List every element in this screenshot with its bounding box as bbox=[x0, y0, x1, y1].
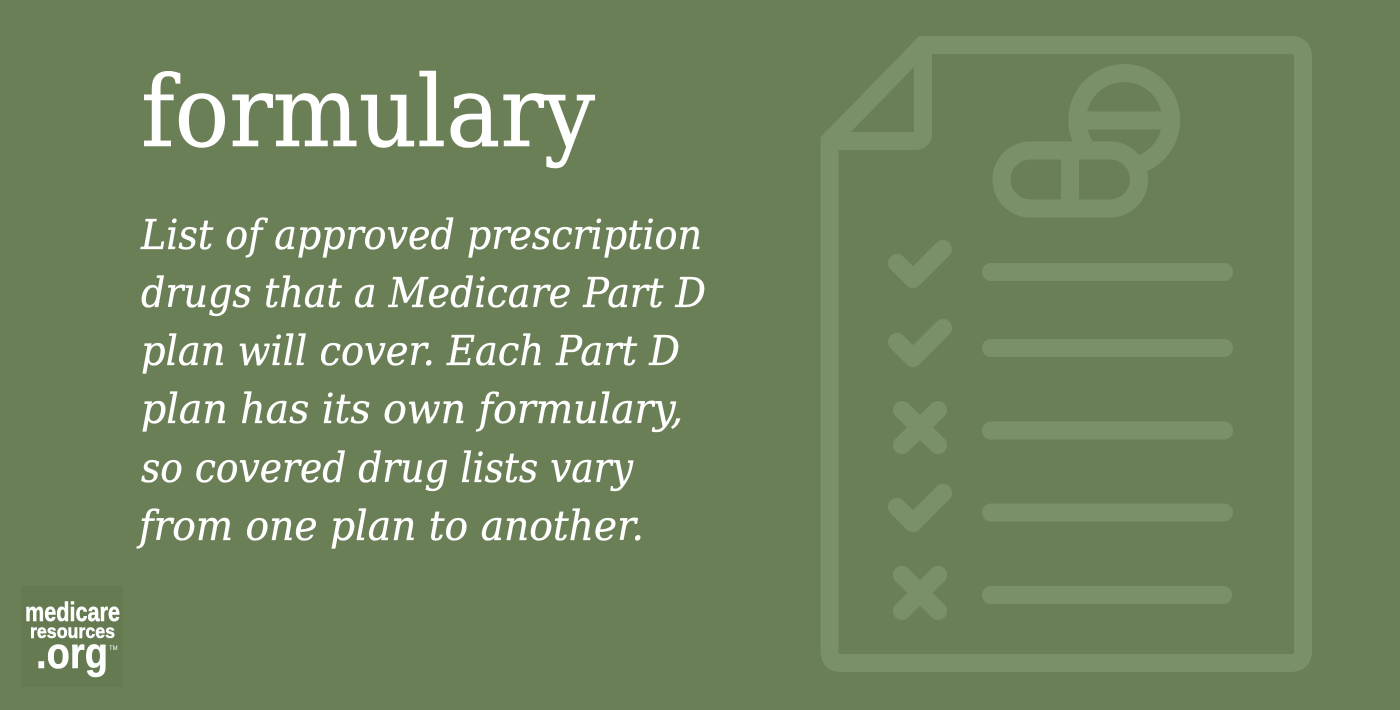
icon: round tablet bbox=[1077, 73, 1171, 165]
icon: capsule bbox=[1002, 150, 1139, 208]
icon: check mark row 1 bbox=[897, 249, 943, 279]
logo: medicareresources.org: resources bbox=[30, 622, 115, 643]
definition text block bbox=[136, 211, 706, 550]
line row 1 bbox=[991, 263, 1224, 281]
definition text block: so covered drug lists vary bbox=[141, 444, 634, 492]
definition text block: drugs that a Medicare Part D bbox=[141, 269, 706, 317]
definition text block: plan will cover. Each Part D bbox=[141, 327, 680, 375]
icon: document outline bbox=[830, 45, 1303, 663]
line row 4 bbox=[991, 504, 1224, 522]
icon: formulary document with pills and checklist bbox=[830, 45, 1303, 663]
line row 3 bbox=[991, 422, 1224, 440]
logo: medicareresources.org: medicare bbox=[25, 597, 120, 627]
icon: check mark row 2 bbox=[897, 328, 943, 358]
definition text block: from one plan to another. bbox=[136, 502, 644, 550]
icon: folded corner bbox=[830, 45, 923, 141]
line row 2 bbox=[991, 339, 1224, 357]
icon: cross row 5 bbox=[902, 575, 938, 611]
title: formulary bbox=[141, 56, 596, 170]
logo: medicareresources.org: .org bbox=[36, 629, 108, 678]
definition text block: plan has its own formulary, bbox=[141, 385, 683, 433]
line row 5 bbox=[991, 586, 1223, 604]
icon: check mark row 4 bbox=[897, 493, 943, 523]
logo: medicareresources.org bbox=[21, 586, 123, 687]
icon: cross row 3 bbox=[902, 410, 938, 445]
logo: medicareresources.org: TM bbox=[109, 646, 118, 652]
definition text block: List of approved prescription bbox=[140, 211, 702, 259]
